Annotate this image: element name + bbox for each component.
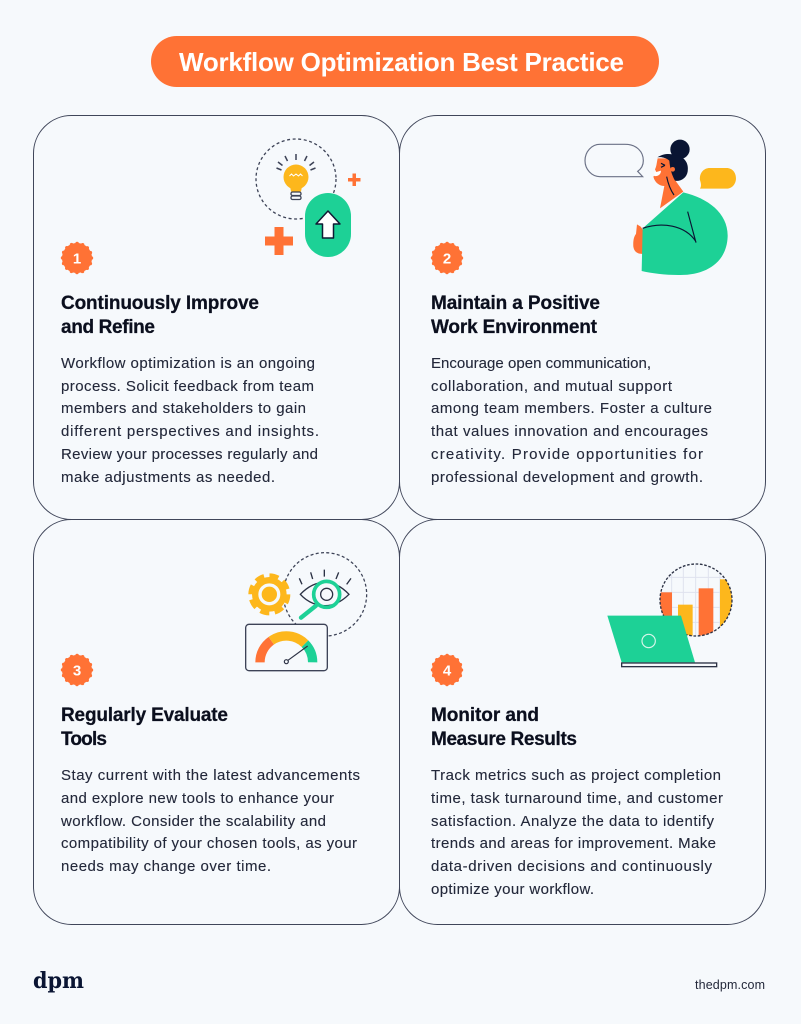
website url: thedpm.com xyxy=(695,978,765,992)
body text 2: professional development and growth. xyxy=(431,469,703,486)
body text 2: Encourage open communication, xyxy=(431,355,651,372)
body text 1: Workflow optimization is an ongoing xyxy=(61,355,315,372)
heading 1 xyxy=(61,293,259,338)
heading 1: and Refine xyxy=(61,317,155,338)
body text 1: make adjustments as needed. xyxy=(61,469,275,486)
icon: person talking with speech bubbles xyxy=(585,140,736,275)
title xyxy=(151,36,659,87)
panel: monitor and measure results xyxy=(400,520,766,924)
body text 2: that values innovation and encourages xyxy=(431,423,708,440)
badge 3 xyxy=(62,655,92,685)
panel: regularly evaluate tools xyxy=(34,520,400,924)
body text 4: trends and areas for improvement. Make xyxy=(431,835,716,852)
body text 3: needs may change over time. xyxy=(61,858,271,875)
title: Workflow Optimization Best Practice xyxy=(179,47,624,77)
body text 4: time, task turnaround time, and customer xyxy=(431,790,723,807)
body text 3: workflow. Consider the scalability and xyxy=(60,813,326,830)
badge 4 xyxy=(432,655,462,685)
badge 3: 3 xyxy=(73,662,81,680)
icon: lightbulb with up arrow xyxy=(256,139,360,257)
badge 4: 4 xyxy=(443,662,452,680)
icon: gear, magnified eye and gauge xyxy=(246,553,367,671)
icon: laptop with bar chart xyxy=(607,563,735,667)
body text 1: Review your processes regularly and xyxy=(61,446,318,463)
body text 4: Track metrics such as project completion xyxy=(431,767,721,784)
heading 3 xyxy=(61,705,228,750)
heading 3: Tools xyxy=(61,729,107,750)
body text 1: different perspectives and insights. xyxy=(61,423,319,440)
body text 3: compatibility of your chosen tools, as your xyxy=(61,835,357,852)
body text 4 xyxy=(431,767,723,898)
logo: dpm: dpm xyxy=(33,968,84,994)
panel: continuously improve xyxy=(34,116,400,520)
badge 1 xyxy=(62,243,92,273)
body text 3: and explore new tools to enhance your xyxy=(61,790,334,807)
body text 3: Stay current with the latest advancements xyxy=(61,767,360,784)
body text 4: satisfaction. Analyze the data to identify xyxy=(431,813,714,830)
body text 1: members and stakeholders to gain xyxy=(61,400,306,417)
heading 2: Work Environment xyxy=(431,317,598,338)
body text 2: among team members. Foster a culture xyxy=(431,400,712,417)
heading 4: Measure Results xyxy=(431,729,577,750)
body text 1: process. Solicit feedback from team xyxy=(61,378,314,395)
body text 4: data-driven decisions and continuously xyxy=(431,858,712,875)
body text 2: creativity. Provide opportunities for xyxy=(431,446,703,463)
heading 4 xyxy=(431,705,577,750)
body text 2 xyxy=(431,355,712,486)
heading 3: Regularly Evaluate xyxy=(61,705,228,726)
badge 2: 2 xyxy=(443,250,451,268)
heading 2: Maintain a Positive xyxy=(431,293,600,314)
heading 1: Continuously Improve xyxy=(61,293,259,314)
badge 1: 1 xyxy=(73,250,81,268)
body text 3 xyxy=(60,767,360,875)
body text 2: collaboration, and mutual support xyxy=(431,378,673,395)
heading 2 xyxy=(431,293,600,338)
badge 2 xyxy=(432,243,462,273)
panel: positive work environment xyxy=(400,116,766,520)
body text 4: optimize your workflow. xyxy=(431,881,594,898)
heading 4: Monitor and xyxy=(431,705,539,726)
body text 1 xyxy=(61,355,319,486)
